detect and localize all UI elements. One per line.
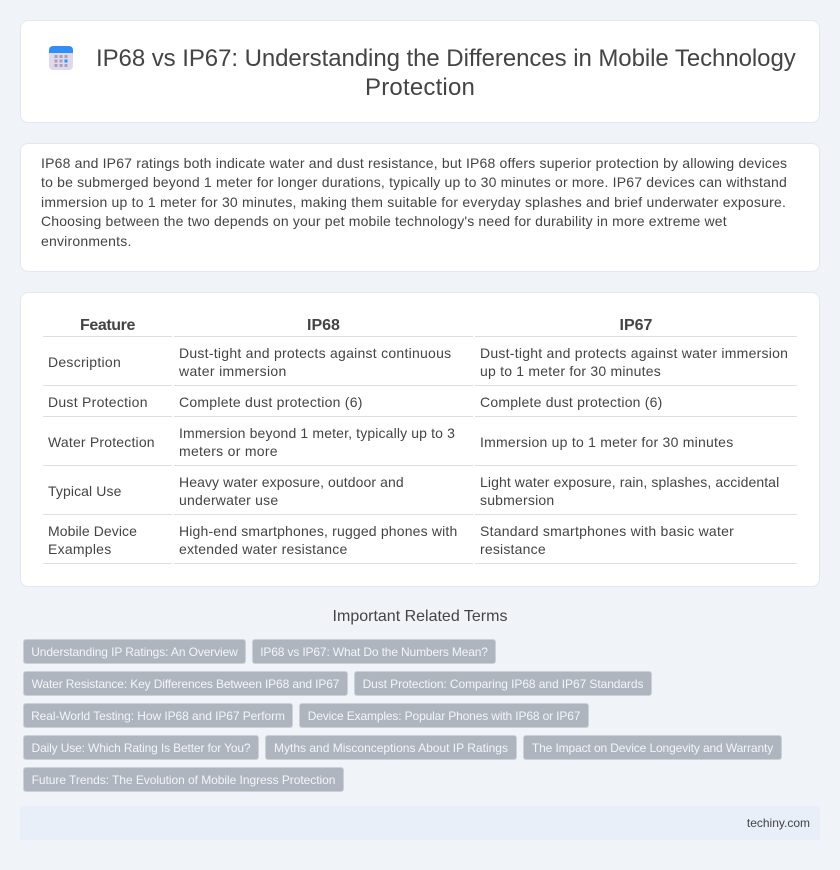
comparison table: Feature xyxy=(80,317,135,334)
title xyxy=(96,45,796,101)
comparison table: Immersion beyond 1 meter, typically up to 3 xyxy=(179,425,455,441)
comparison table: Immersion up to 1 meter for 30 minutes xyxy=(480,434,733,450)
comparison table: Dust-tight and protects against continuous xyxy=(179,345,451,361)
intro text: Choosing between the two depends on your pet mobile technology's need for durability in more extreme wet xyxy=(41,213,727,229)
related term tags: IP68 vs IP67: What Do the Numbers Mean? xyxy=(260,645,488,659)
comparison table: Water Protection xyxy=(48,434,155,450)
footer xyxy=(20,806,820,840)
comparison table: underwater use xyxy=(179,492,278,508)
related term tags: Water Resistance: Key Differences Between IP68 and IP67 xyxy=(32,677,339,691)
related term tags: Understanding IP Ratings: An Overview xyxy=(31,645,238,659)
title: IP68 vs IP67: Understanding the Differences in Mobile Technology xyxy=(96,45,796,72)
footer: techiny.com xyxy=(747,816,810,830)
comparison table: Standard smartphones with basic water xyxy=(480,523,734,539)
comparison table: meters or more xyxy=(179,443,278,459)
comparison table: Complete dust protection (6) xyxy=(480,394,663,410)
related term tags: Real-World Testing: How IP68 and IP67 Perform xyxy=(31,709,285,723)
comparison table: up to 1 meter for 30 minutes xyxy=(480,363,661,379)
comparison table: water immersion xyxy=(179,363,287,379)
comparison table: submersion xyxy=(480,492,554,508)
comparison table: Dust-tight and protects against water immersion xyxy=(480,345,788,361)
title: Protection xyxy=(365,74,475,101)
intro text xyxy=(41,155,787,249)
comparison table: Mobile Device xyxy=(48,523,137,539)
comparison table: extended water resistance xyxy=(179,541,347,557)
related term tags: Daily Use: Which Rating Is Better for You? xyxy=(32,741,250,755)
related term tags: Future Trends: The Evolution of Mobile Ingress Protection xyxy=(32,773,335,787)
related term tags: Dust Protection: Comparing IP68 and IP67 Standards xyxy=(363,677,643,691)
comparison table: Examples xyxy=(48,541,111,557)
related term tags: Device Examples: Popular Phones with IP68 or IP67 xyxy=(308,709,580,723)
related term tags: The Impact on Device Longevity and Warranty xyxy=(532,741,773,755)
heading: related terms: Important Related Terms xyxy=(333,608,507,625)
comparison table: IP67 xyxy=(620,317,652,334)
intro text: environments. xyxy=(41,233,132,249)
panel: intro paragraph xyxy=(20,143,820,272)
title card xyxy=(20,20,820,123)
comparison table: Heavy water exposure, outdoor and xyxy=(179,474,404,490)
related term tags xyxy=(23,639,782,792)
comparison table: IP68 xyxy=(307,317,340,334)
panel: comparison table xyxy=(20,292,820,587)
comparison table: Typical Use xyxy=(48,483,121,499)
comparison table: Dust Protection xyxy=(48,394,148,410)
comparison table: Description xyxy=(48,354,121,370)
comparison table: resistance xyxy=(480,541,546,557)
comparison table: Light water exposure, rain, splashes, accidental xyxy=(480,474,779,490)
comparison table xyxy=(43,317,797,564)
related term tags: Myths and Misconceptions About IP Ratings xyxy=(274,741,508,755)
intro text: to be submerged beyond 1 meter for longer durations, typically up to 30 minutes or more. IP67 devices can withstand xyxy=(41,174,787,190)
icon: calendar xyxy=(49,46,73,70)
comparison table: Complete dust protection (6) xyxy=(179,394,363,410)
comparison table: High-end smartphones, rugged phones with xyxy=(179,523,457,539)
intro text: immersion up to 1 meter for 30 minutes, making them suitable for everyday splashes and brief underwater exposure. xyxy=(41,194,786,210)
intro text: IP68 and IP67 ratings both indicate water and dust resistance, but IP68 offers superior protection by allowing devices xyxy=(41,155,787,171)
